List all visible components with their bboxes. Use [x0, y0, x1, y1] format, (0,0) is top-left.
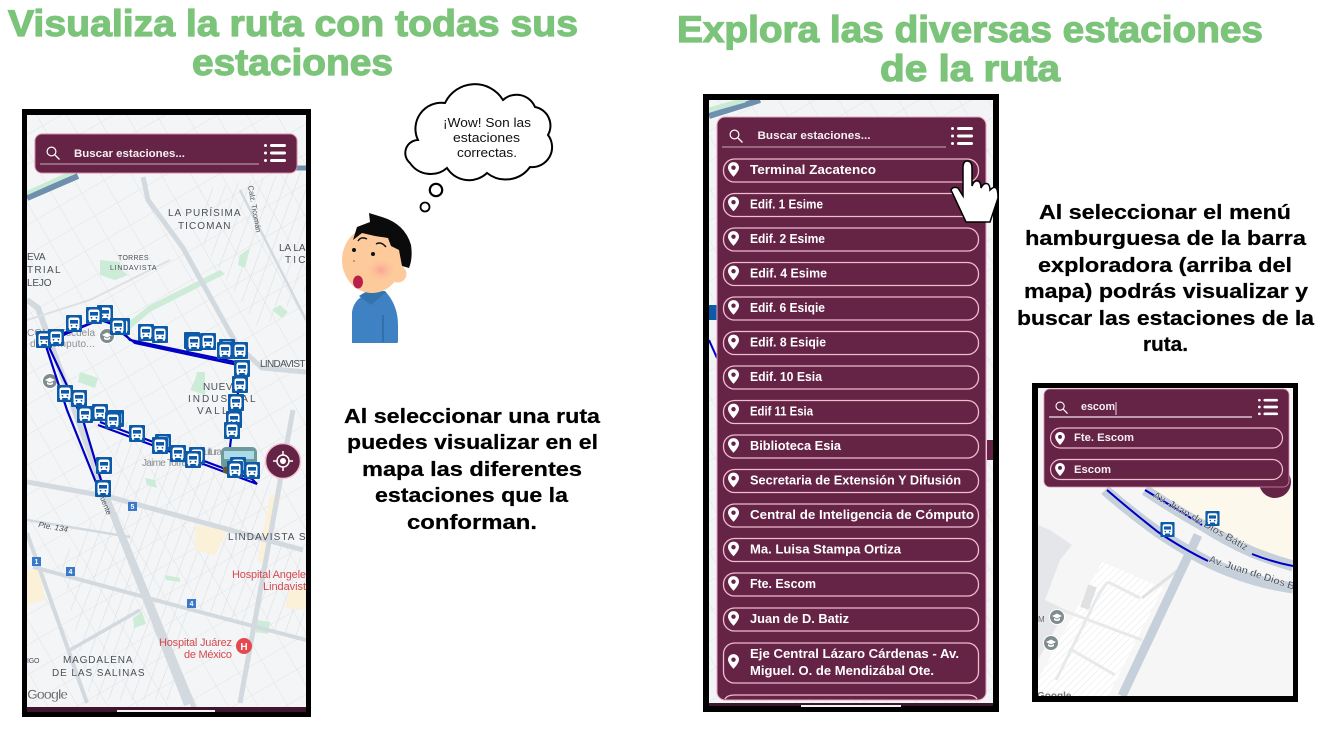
text block: menu description: mapa) podrás visualizar y — [1024, 281, 1309, 303]
panel: phone with station list — [703, 94, 999, 712]
panel: phone with search result: Av. Juan de Dios Bátiz — [1150, 489, 1250, 554]
title: right heading — [677, 9, 1263, 89]
search result panel — [1044, 389, 1289, 487]
station list: Edif. 1 Esime — [750, 198, 823, 212]
panel: phone with route map: Hospital Angele — [232, 569, 306, 581]
station list — [724, 159, 978, 699]
panel: phone with route map: LA PURÍSIMA — [168, 206, 241, 219]
search result panel: escom — [1081, 401, 1115, 413]
panel: phone with route map: NUEV — [203, 382, 233, 393]
panel: phone with route map: LINDAVIST — [260, 359, 306, 370]
thought cloud: estaciones — [453, 131, 520, 145]
title: left heading: estaciones — [192, 42, 393, 83]
panel: phone with route map: TIC — [285, 255, 306, 266]
station list: Miguel. O. de Mendizábal Ote. — [750, 664, 934, 678]
text block: menu description: ruta. — [1143, 334, 1188, 356]
panel: phone with route map: LA LA — [279, 243, 306, 254]
search bar: Buscar estaciones... — [74, 148, 185, 160]
text block: route description: conforman. — [407, 512, 537, 534]
station list: Secretaria de Extensión Y Difusión — [750, 474, 961, 488]
panel: phone with route map: EVA — [27, 252, 46, 263]
title: left heading — [8, 3, 578, 83]
station list: Edif 11 Esia — [750, 404, 814, 418]
station list: Juan de D. Batiz — [750, 612, 849, 626]
station list: Ma. Luisa Stampa Ortiza — [750, 542, 902, 556]
panel: phone with route map: DE LAS SALINAS — [52, 668, 145, 679]
station list: Central de Inteligencia de Cómputo — [750, 508, 974, 522]
panel: phone with search result: Google — [1037, 691, 1072, 702]
panel: phone with route map: TICOMAN — [178, 221, 231, 232]
title: left heading: Visualiza la ruta con todas sus — [8, 3, 578, 44]
panel: phone with route map: MAGDALENA — [63, 655, 133, 666]
panel: phone with route map: TRIAL — [27, 265, 61, 276]
panel: phone with route map: 1 — [35, 559, 39, 566]
title: right heading: de la ruta — [880, 48, 1060, 89]
station list: Biblioteca Esia — [750, 439, 842, 453]
panel: phone with route map: IGO — [27, 658, 40, 665]
panel: phone with route map: LINDAVISTA — [110, 265, 157, 272]
title: right heading: Explora las diversas estaciones — [677, 9, 1263, 50]
panel: phone with search result — [1032, 383, 1298, 702]
panel: phone with search result: M — [1038, 615, 1045, 624]
station list: Fte. Escom — [750, 577, 816, 591]
panel: phone with route map: Calz. Ticomán — [246, 185, 263, 233]
text block: route description: puedes visualizar en el — [347, 432, 598, 454]
panel: phone with route map: COM - Escuela — [27, 328, 95, 339]
thought cloud — [405, 84, 552, 212]
panel: phone with route map: Pte. 134 — [38, 520, 69, 534]
station list: Edif. 10 Esia — [750, 370, 823, 384]
panel: phone with route map: 5 — [131, 504, 135, 511]
text block: route description: mapa las diferentes — [362, 459, 582, 481]
text block: menu description: Al seleccionar el menú — [1039, 202, 1291, 224]
panel: phone with route map: INDUST AL — [188, 394, 256, 405]
station list: Edif. 2 Esime — [750, 232, 825, 246]
thought cloud: ¡Wow! Son las — [443, 116, 531, 130]
panel: phone with route map: VALLE — [197, 406, 237, 417]
station list search bar: Buscar estaciones... — [758, 130, 870, 142]
panel: phone with route map: 4 — [190, 601, 194, 608]
station list: Edif. 6 Esiqie — [750, 301, 825, 315]
text block: route description — [344, 406, 601, 534]
panel: phone with route map: Lindavist — [263, 581, 306, 593]
panel: phone with route map: uente — [98, 495, 114, 516]
text block: menu description: exploradora (arriba del — [1038, 255, 1292, 277]
search bar — [35, 134, 297, 173]
panel: phone with route map: de Cómputo... — [30, 339, 95, 350]
search result panel: Escom — [1074, 464, 1111, 476]
panel: phone with route map: LEJO — [27, 278, 52, 289]
text block: menu description — [1017, 202, 1315, 356]
panel: phone with route map — [22, 109, 311, 717]
text block: route description: estaciones que la — [375, 485, 569, 507]
panel: phone with route map: Hospital Juárez — [159, 637, 232, 649]
station list: Edif. 8 Esiqie — [750, 336, 826, 350]
station list: Eje Central Lázaro Cárdenas - Av. — [750, 647, 959, 661]
station list: Terminal Zacatenco — [750, 163, 876, 177]
panel: phone with search result: Av. Juan de Dios B — [1207, 553, 1297, 593]
search result panel: Fte. Escom — [1074, 432, 1134, 444]
panel: phone with route map: LINDAVISTA S — [228, 532, 306, 543]
icon: hand cursor — [951, 161, 998, 222]
panel: phone with route map: 4 — [69, 569, 73, 576]
panel: phone with route map: Jaime Torres Bo — [142, 458, 204, 469]
thought cloud: correctas. — [457, 146, 517, 160]
icon: surprised person — [342, 213, 412, 343]
station list: Edif. 4 Esime — [750, 266, 827, 280]
panel: phone with route map: TORRES — [118, 255, 149, 262]
panel: phone with route map: de México — [184, 649, 232, 661]
station list search bar — [722, 127, 973, 147]
panel: phone with route map: H — [240, 642, 248, 653]
text block: menu description: buscar las estaciones de la — [1017, 308, 1315, 330]
location button — [266, 444, 300, 478]
panel: phone with route map: Cultura — [198, 447, 222, 458]
text block: route description: Al seleccionar una ruta — [344, 406, 601, 428]
panel: phone with route map: Google — [27, 686, 68, 702]
text block: menu description: hamburguesa de la barra — [1025, 228, 1307, 250]
